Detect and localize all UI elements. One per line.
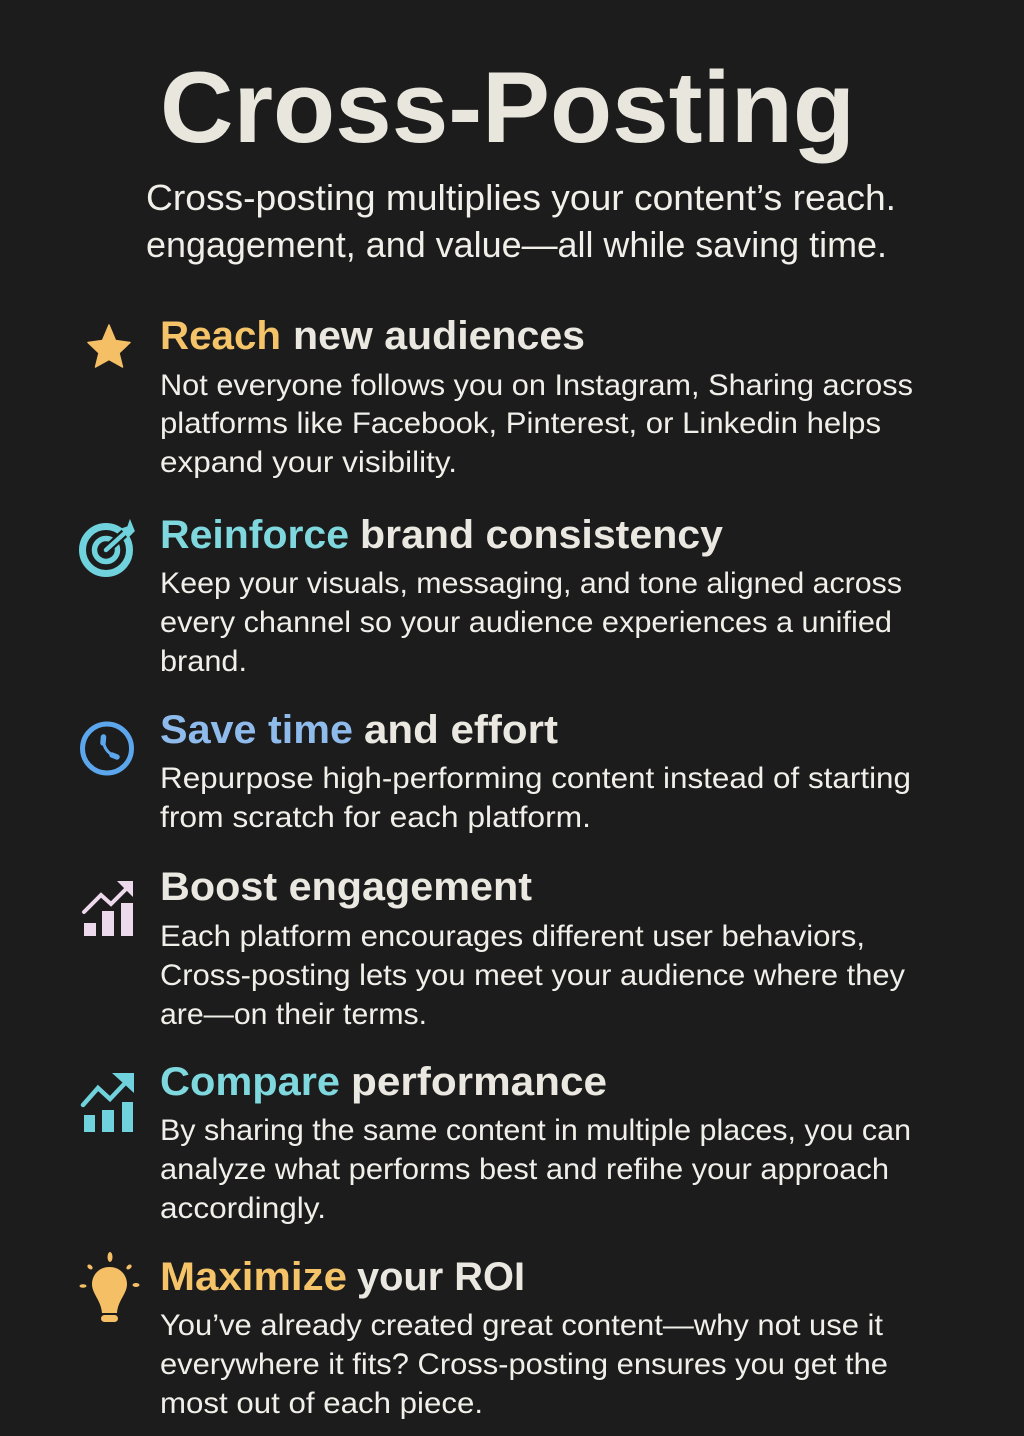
text: boost description: Cross-posting lets you meet your audience where they [160, 959, 905, 992]
text: compare description: By sharing the same content in multiple places, you can [160, 1114, 911, 1147]
heading: reach new audiences: Reach [160, 314, 281, 358]
heading: reinforce brand consistency: Reinforce [160, 513, 349, 557]
subtitle: engagement, and value—all while saving time. [146, 224, 887, 265]
heading: compare performance: Compare [160, 1060, 340, 1104]
text: reinforce description: Keep your visuals, messaging, and tone aligned across [160, 567, 902, 600]
heading: reinforce brand consistency [160, 513, 724, 557]
text: reach description [160, 369, 913, 479]
icon: rising bar chart, lilac [84, 881, 133, 936]
panel: compare performance [83, 1060, 911, 1225]
text: save time description: Repurpose high-performing content instead of starting [160, 762, 911, 795]
icon: target with dart [82, 521, 134, 574]
heading: compare performance: performance [351, 1060, 607, 1104]
text: reach description: expand your visibility. [160, 446, 457, 479]
panel: reinforce brand consistency [82, 513, 902, 678]
heading: save time and effort: and effort [364, 708, 558, 752]
text: save time description [160, 762, 911, 834]
text: boost description: are—on their terms. [160, 998, 427, 1031]
panel: maximize your ROI [80, 1252, 888, 1420]
text: compare description [160, 1114, 911, 1225]
icon: light bulb [80, 1252, 140, 1322]
text: boost description: Each platform encourages different user behaviors, [160, 920, 865, 953]
text: reinforce description [160, 567, 902, 678]
text: maximize description: most out of each piece. [160, 1387, 483, 1420]
heading: boost engagement: Boost engagement [160, 865, 532, 909]
heading: compare performance [160, 1060, 607, 1104]
text: compare description: analyze what performs best and refihe your approach [160, 1153, 889, 1186]
heading: save time and effort [160, 708, 558, 752]
icon: clock with phone handset [82, 724, 132, 773]
text: reinforce description: brand. [160, 645, 247, 678]
icon: rising bar chart, teal [83, 1073, 134, 1132]
heading: maximize your ROI [160, 1255, 525, 1299]
heading: maximize your ROI: your ROI [357, 1255, 525, 1299]
heading: maximize your ROI: Maximize [160, 1255, 347, 1299]
subtitle: Cross-posting multiplies your content’s reach. [146, 177, 896, 218]
heading: save time and effort: Save time [160, 708, 353, 752]
text: maximize description: You’ve already created great content—why not use it [160, 1309, 883, 1342]
text: reach description: platforms like Facebook, Pinterest, or Linkedin helps [160, 407, 881, 440]
text: boost description [160, 920, 905, 1031]
heading: reach new audiences: new audiences [293, 314, 585, 358]
text: maximize description: everywhere it fits? Cross-posting ensures you get the [160, 1348, 888, 1381]
text: reinforce description: every channel so your audience experiences a unified [160, 606, 892, 639]
subtitle [146, 177, 896, 265]
heading: reach new audiences [160, 314, 585, 358]
text: save time description: from scratch for each platform. [160, 801, 591, 834]
panel: boost engagement [84, 865, 905, 1031]
text: compare description: accordingly. [160, 1192, 326, 1225]
panel: save time and effort [82, 708, 911, 834]
text: maximize description [160, 1309, 888, 1420]
title: Cross-Posting [160, 52, 855, 164]
panel: reach new audiences [88, 314, 913, 479]
icon: star [88, 325, 130, 367]
heading: reinforce brand consistency: brand consistency [360, 513, 724, 557]
text: reach description: Not everyone follows you on Instagram, Sharing across [160, 369, 913, 402]
